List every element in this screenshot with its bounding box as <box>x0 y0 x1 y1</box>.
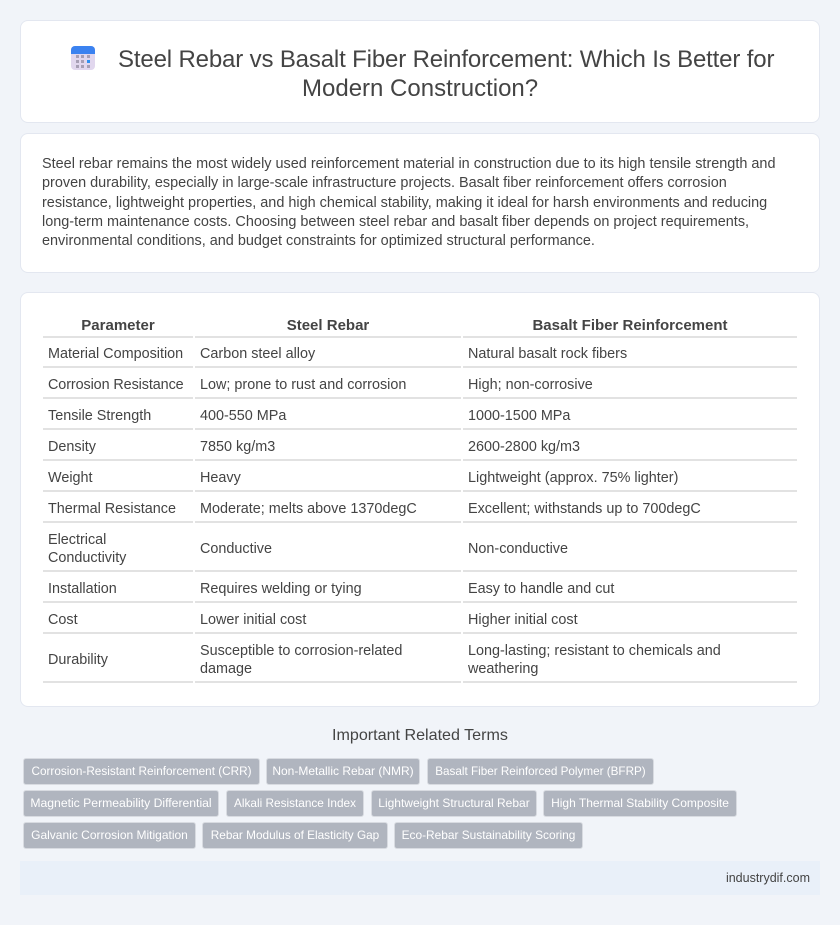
table: comparison: Cost <box>48 612 78 628</box>
table: comparison: Parameter <box>81 317 155 334</box>
tag group: related terms: Alkali Resistance Index <box>234 796 356 810</box>
table: comparison: Moderate; melts above 1370degC <box>200 501 417 517</box>
table: comparison: High; non-corrosive <box>468 377 593 393</box>
table: comparison: Material Composition <box>48 346 183 362</box>
table: comparison: Lower initial cost <box>200 612 306 628</box>
title: Modern Construction? <box>302 75 538 102</box>
text block: summary: environmental conditions, and budget constraints for optimized structural performance. <box>42 233 595 249</box>
table: comparison: Corrosion Resistance <box>48 377 184 393</box>
table: comparison: Easy to handle and cut <box>468 581 614 597</box>
table: comparison: Conductivity <box>48 550 126 566</box>
tag group: related terms: Eco-Rebar Sustainability Scoring <box>402 828 575 842</box>
tag group: related terms: Basalt Fiber Reinforced Polymer (BFRP) <box>435 765 646 778</box>
table: comparison: Durability <box>48 652 108 668</box>
table: comparison: 2600-2800 kg/m3 <box>468 439 580 455</box>
tag group: related terms <box>23 758 737 849</box>
table: comparison: weathering <box>468 661 538 677</box>
tag group: related terms: Lightweight Structural Rebar <box>378 796 530 810</box>
table: comparison: Carbon steel alloy <box>200 346 315 362</box>
panel: title card <box>20 20 820 123</box>
tag group: related terms: Rebar Modulus of Elasticity Gap <box>211 828 379 842</box>
tag group: related terms: Galvanic Corrosion Mitigation <box>31 828 188 842</box>
tag group: related terms: Non-Metallic Rebar (NMR) <box>272 764 414 778</box>
table: comparison: Weight <box>48 470 93 486</box>
table: comparison: damage <box>200 661 252 677</box>
footer: source: industrydif.com <box>726 871 810 885</box>
table: comparison: Heavy <box>200 470 241 486</box>
text block: summary <box>42 156 775 249</box>
panel: comparison table card <box>20 292 820 707</box>
table: comparison: Lightweight (approx. 75% lighter) <box>468 470 678 486</box>
tag group: related terms: Magnetic Permeability Differential <box>30 796 212 810</box>
text block: summary: resistance, lightweight properties, and high chemical stability, making it ideal for harsh environments and reducing <box>42 195 767 211</box>
table: comparison: 400-550 MPa <box>200 408 286 424</box>
table: comparison: Tensile Strength <box>48 408 151 424</box>
heading: related terms: Important Related Terms <box>332 726 508 744</box>
table: comparison: Susceptible to corrosion-related <box>200 643 402 659</box>
text block: summary: long-term maintenance costs. Choosing between steel rebar and basalt fiber depends on project requirements, <box>42 214 749 230</box>
table: comparison <box>43 317 797 683</box>
text block: summary: Steel rebar remains the most widely used reinforcement material in construction due to its high tensile strength and <box>42 156 775 172</box>
panel: summary card <box>20 133 820 273</box>
table: comparison: Long-lasting; resistant to chemicals and <box>468 643 721 659</box>
footer bar <box>20 861 820 895</box>
icon: calendar <box>71 46 95 70</box>
table: comparison: Low; prone to rust and corrosion <box>200 377 406 393</box>
table: comparison: Thermal Resistance <box>48 501 176 517</box>
tag group: related terms: Corrosion-Resistant Reinforcement (CRR) <box>31 765 252 778</box>
table: comparison: Excellent; withstands up to 700degC <box>468 501 701 517</box>
table: comparison: Density <box>48 439 96 455</box>
table: comparison: Installation <box>48 581 117 597</box>
table: comparison: Higher initial cost <box>468 612 578 628</box>
table: comparison: Requires welding or tying <box>200 581 362 597</box>
table: comparison: Basalt Fiber Reinforcement <box>532 317 728 334</box>
table: comparison: 7850 kg/m3 <box>200 439 275 455</box>
title <box>118 46 774 102</box>
table: comparison: Non-conductive <box>468 541 568 557</box>
table: comparison: Electrical <box>48 532 106 548</box>
table: comparison: Natural basalt rock fibers <box>468 346 627 362</box>
title: Steel Rebar vs Basalt Fiber Reinforcement: Which Is Better for <box>118 46 774 73</box>
table: comparison: 1000-1500 MPa <box>468 408 570 424</box>
tag group: related terms: High Thermal Stability Composite <box>551 796 729 810</box>
table: comparison: Conductive <box>200 541 272 557</box>
table: comparison: Steel Rebar <box>287 317 369 334</box>
text block: summary: proven durability, especially in large-scale infrastructure projects. Basalt fiber reinforcement offers corrosion <box>42 175 727 191</box>
